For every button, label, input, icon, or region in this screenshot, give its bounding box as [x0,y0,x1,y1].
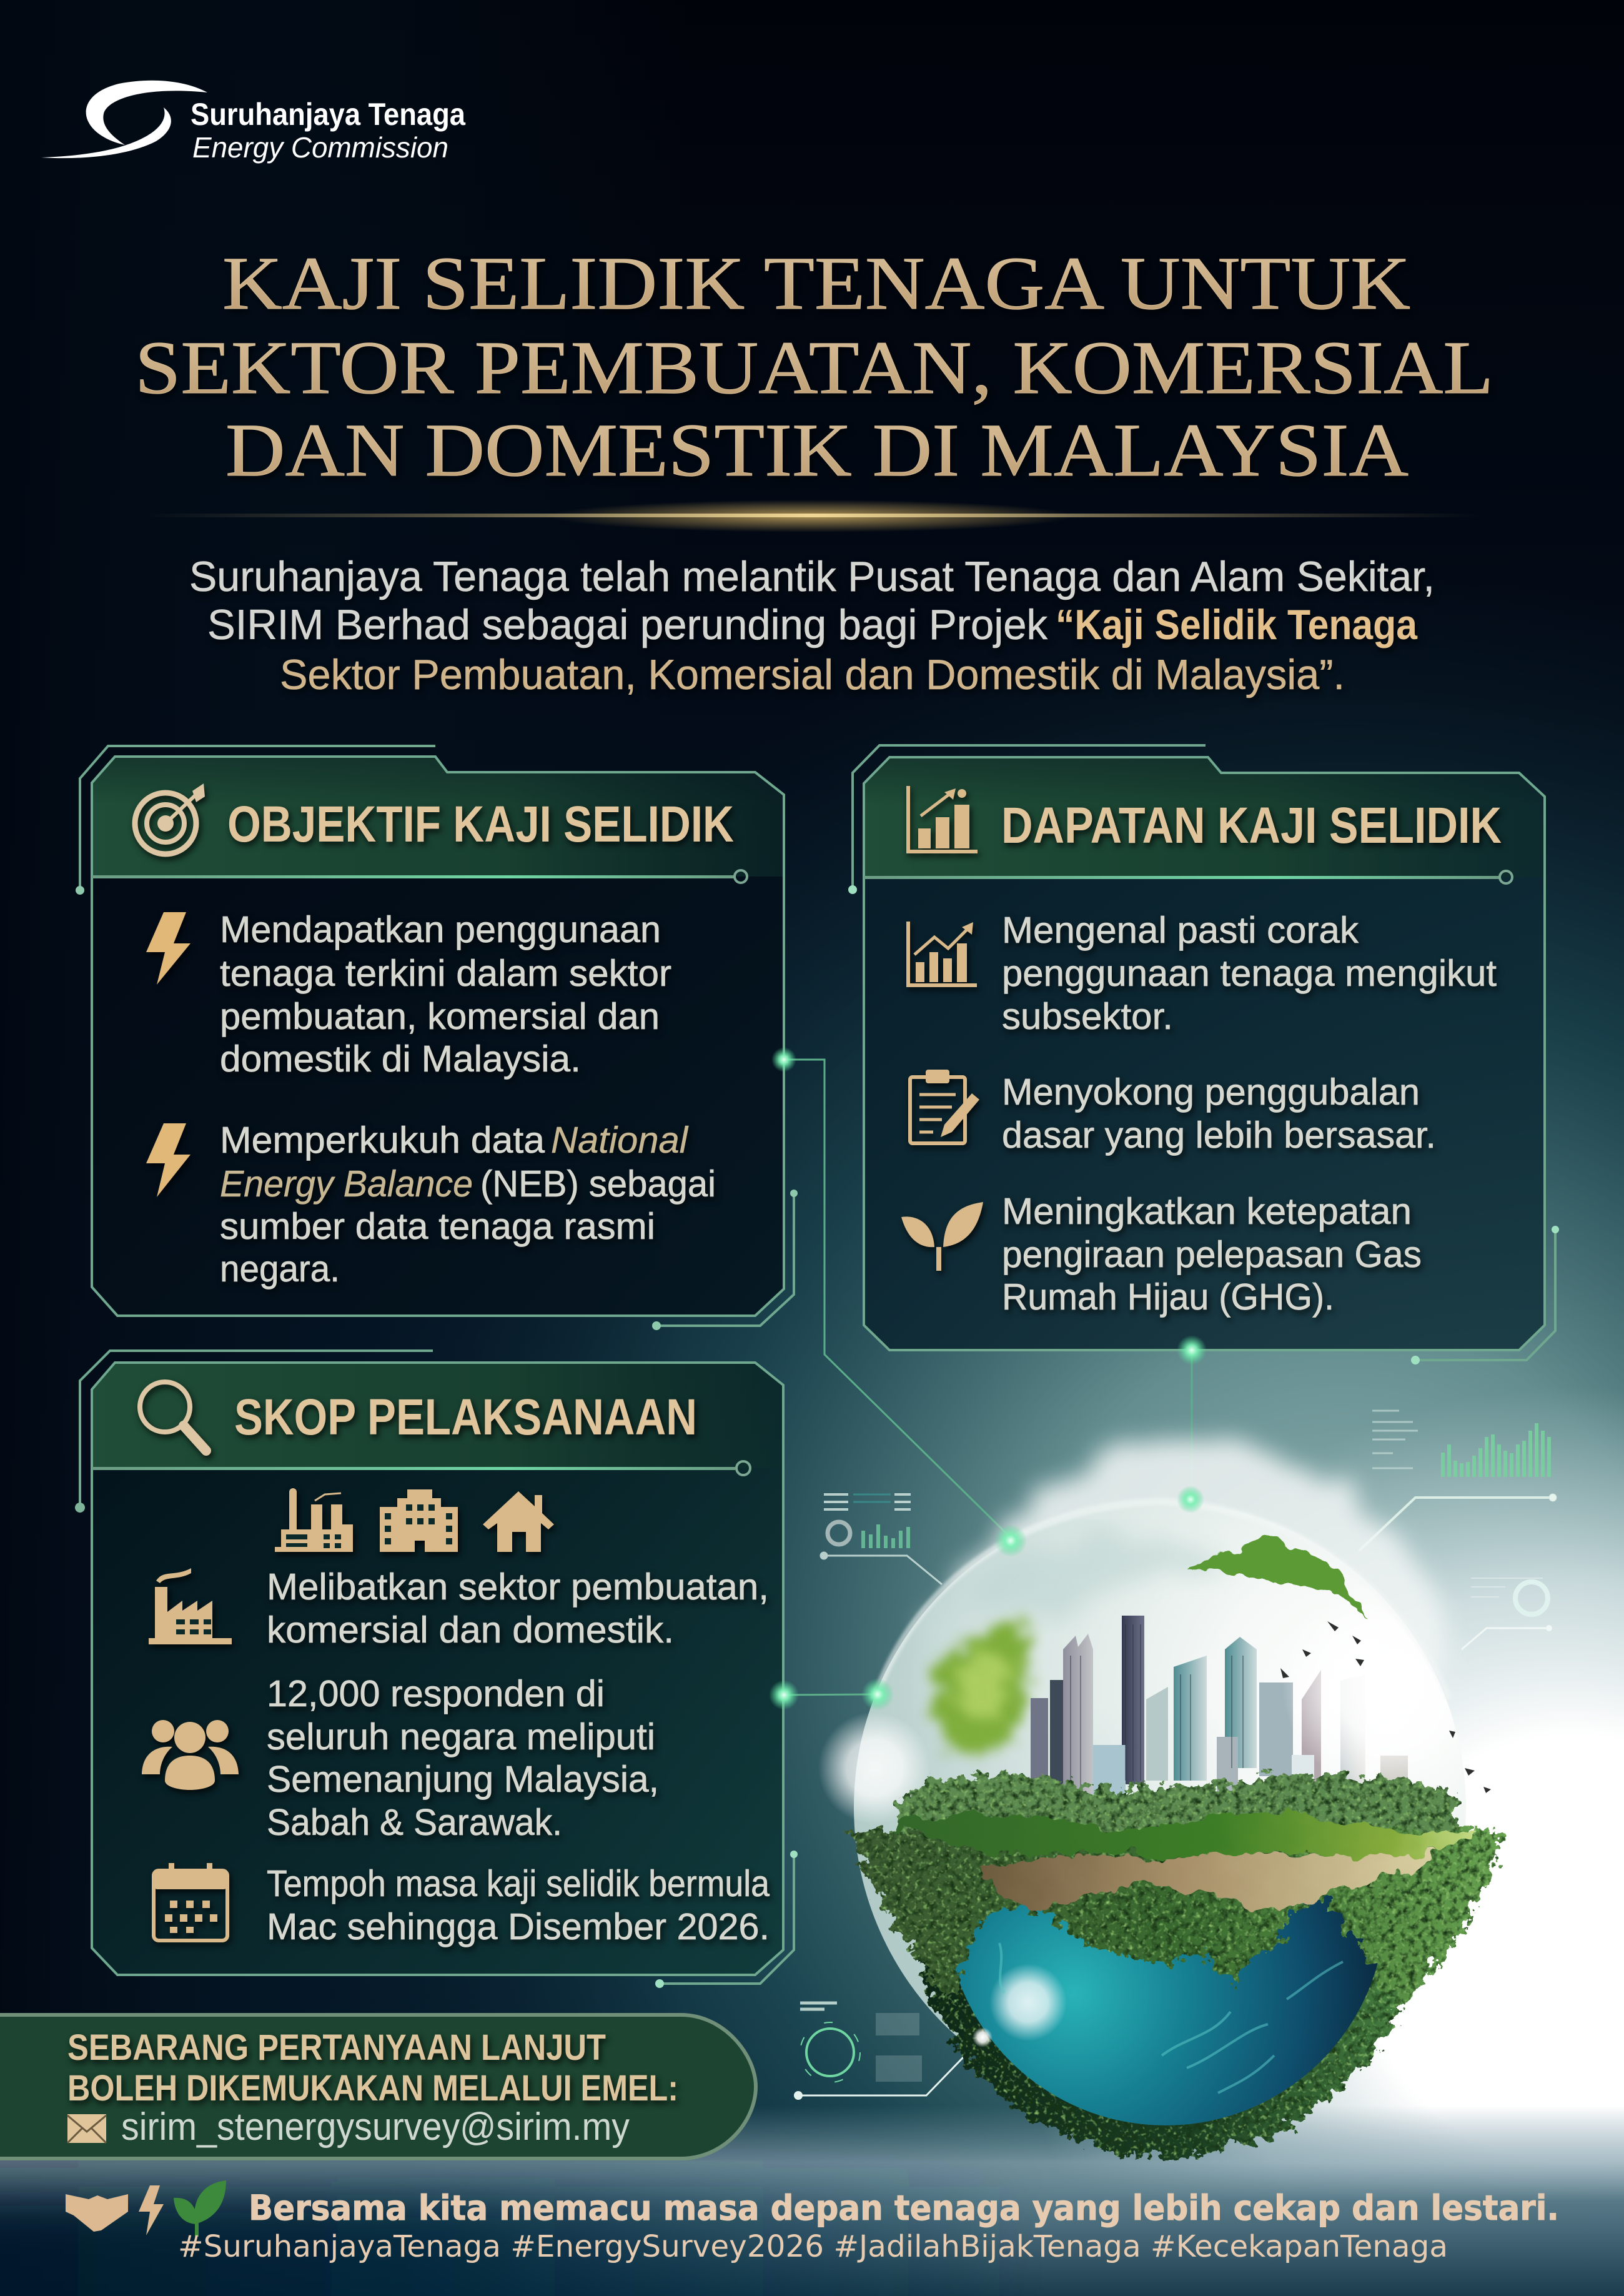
scope text 2: 12,000 responden di [267,1673,605,1714]
slogan: Bersama kita memacu masa depan tenaga yang lebih cekap dan lestari. [249,2188,1559,2228]
intro text: Sektor Pembuatan, Komersial dan Domestik di Malaysia”. [280,651,1345,698]
sky haze [962,1536,1224,1618]
globe illustration [794,1411,1557,2157]
title: KAJI SELIDIK TENAGA UNTUK [222,242,1410,326]
gold divider [144,500,1480,532]
objective text 1: domestik di Malaysia. [220,1038,581,1080]
objective text 1: pembuatan, komersial dan [220,996,660,1037]
foliage left [934,1621,1031,1756]
heading: SKOP PELAKSANAAN [234,1389,697,1446]
icon: factory [149,1568,232,1644]
objective text 2: Energy Balance [220,1163,473,1205]
dome rim [874,1501,1449,1699]
icon: target [135,783,205,854]
contact heading: SEBARANG PERTANYAAN LANJUT [67,2027,606,2068]
objective text 2 [220,1120,716,1290]
icon: house [483,1491,554,1552]
icon: bolt [139,2185,164,2235]
footer [66,2180,1559,2264]
icon: industrial plant [275,1488,353,1552]
hud widget: bottom left [794,2003,983,2100]
ocean map lines [999,1943,1343,2093]
scope text 1: komersial dan domestik. [267,1609,674,1651]
scope text 3: Mac sehingga Disember 2026. [267,1906,770,1947]
objective text 2: negara. [220,1248,340,1290]
hashtags: #SuruhanjayaTenaga #EnergySurvey2026 #JadilahBijakTenaga #KecekapanTenaga [178,2229,1448,2264]
finding text 1 [1002,910,1497,1037]
sun glare [1282,1579,1495,1791]
objective text 1 [220,909,671,1080]
scope text 2: seluruh negara meliputi [267,1716,655,1757]
contact heading [67,2027,678,2109]
icon: bolt [146,912,191,985]
objective text 1: tenaga terkini dalam sektor [220,953,671,994]
hud widget: top right [1359,1411,1557,1551]
icon: line chart [908,922,977,985]
left rim glow [818,1712,931,1824]
finding text 2: dasar yang lebih bersasar. [1002,1115,1436,1156]
title: SEKTOR PEMBUATAN, KOMERSIAL [135,326,1493,410]
icon: clipboard [910,1070,979,1143]
intro text [189,553,1435,698]
icon: swoosh [41,81,207,158]
contact box [0,2015,756,2159]
icon: calendar [154,1863,227,1941]
intro text: “Kaji Selidik Tenaga [1056,601,1418,649]
scope text 2 [267,1673,659,1843]
ocean sphere [946,1686,1385,2125]
finding text 3: Rumah Hijau (GHG). [1002,1276,1334,1318]
finding text 3 [1002,1191,1422,1318]
heading: OBJEKTIF KAJI SELIDIK [227,796,734,853]
objective text 2: (NEB) sebagai [480,1163,716,1205]
title [135,242,1493,492]
scope text 2: Semenanjung Malaysia, [267,1759,659,1800]
icon: magnifier [140,1382,206,1451]
hud widget: ring right [1462,1578,1552,1649]
objective text 1: Mendapatkan penggunaan [220,909,661,950]
icon: people [142,1720,239,1790]
finding text 2: Menyokong penggubalan [1002,1071,1420,1113]
objective text 2: Memperkukuh data [220,1120,545,1161]
panel: dapatan kaji selidik [848,745,1559,1364]
city skyline [1031,1616,1408,1801]
objective text 2: National [551,1120,689,1161]
dome contact nodes [994,1524,1027,1557]
birds [1280,1621,1491,1793]
icon: office buildings [380,1489,458,1552]
logo subtitle: Energy Commission [192,131,448,164]
finding text 1: penggunaan tenaga mengikut [1002,953,1497,994]
shrubs at city base [899,1774,1455,1849]
panel: objektif kaji selidik [76,746,798,1330]
scope text 1: Melibatkan sektor pembuatan, [267,1566,769,1608]
finding text 3: Meningkatkan ketepatan [1002,1191,1412,1232]
grass strip [894,1809,1480,1857]
objective text 2: sumber data tenaga rasmi [220,1206,655,1247]
floating green land [1187,1540,1368,1618]
finding text 1: Mengenal pasti corak [1002,910,1359,951]
mist cloud [914,1437,1446,1724]
bottom moss rim [911,1642,1425,2157]
ocean highlight [989,1964,1067,2041]
contact heading: BOLEH DIKEMUKAKAN MELALUI EMEL: [67,2068,678,2109]
panel: skop pelaksanaan [75,1351,798,1988]
scope text 3 [267,1863,770,1947]
scope text 2: Sabah & Sarawak. [267,1802,562,1843]
intro text: Suruhanjaya Tenaga telah melantik Pusat Tenaga dan Alam Sekitar, [189,553,1435,600]
finding text 3: pengiraan pelepasan Gas [1002,1234,1422,1275]
email address: sirim_stenergysurvey@sirim.my [121,2105,630,2149]
icon: envelope [67,2114,106,2143]
icon: bolt [146,1123,191,1197]
sand strip [981,1849,1437,1909]
logo wordmark: Suruhanjaya Tenaga [191,97,466,132]
hud widget: top left [820,1494,942,1584]
finding text 1: subsektor. [1002,996,1173,1037]
scope text 1 [267,1566,769,1651]
heading: DAPATAN KAJI SELIDIK [1001,797,1502,854]
intro text: SIRIM Berhad sebagai perunding bagi Projek [207,601,1048,649]
moss band [851,1831,1502,2009]
title: DAN DOMESTIK DI MALAYSIA [225,409,1409,492]
icon: sprout [174,2180,226,2237]
icon: bar chart [908,786,978,852]
lower sphere [911,1642,1425,2157]
glass dome [819,1498,1466,2036]
finding text 2 [1002,1071,1436,1156]
logo: Suruhanjaya Tenaga Energy Commission [41,81,466,164]
icon: sprout [901,1202,983,1271]
icon: handshake [66,2194,128,2232]
scope text 3: Tempoh masa kaji selidik bermula [267,1863,770,1904]
circuit connector lines [769,1047,1207,1710]
